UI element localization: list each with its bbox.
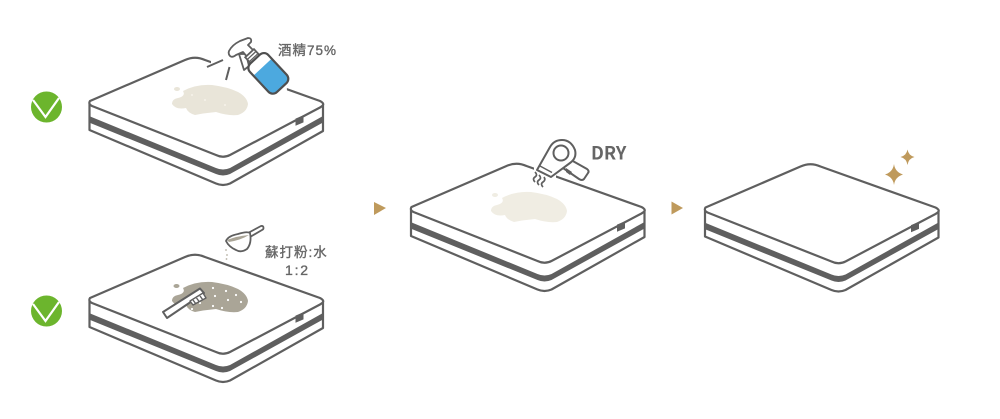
- stain: drying: [491, 192, 567, 222]
- label: baking soda to water ratio: [265, 244, 328, 278]
- arrow: to clean: [672, 202, 683, 214]
- check icon: step 1: [31, 92, 62, 122]
- stain: baking soda paste: [172, 282, 248, 312]
- gap behind spray bottle: [211, 53, 287, 93]
- label: alcohol 75%: 酒精75%: [278, 43, 337, 58]
- icon: sparkles: [885, 150, 914, 185]
- clean mattress: [704, 150, 939, 292]
- gap behind hair dryer: [534, 160, 556, 182]
- stain: alcohol-damped: [172, 85, 248, 115]
- icon: spray bottle: [229, 38, 291, 96]
- mattress with alcohol spray: [89, 38, 337, 185]
- label: baking soda to water ratio: 蘇打粉:水: [265, 244, 328, 260]
- spray lines: [207, 60, 230, 80]
- label: baking soda to water ratio: 1:2: [285, 262, 310, 278]
- icon: measuring scoop: [225, 226, 264, 260]
- mattress with baking soda paste: [89, 226, 328, 382]
- icon: hair dryer: [534, 140, 589, 187]
- arrow: to drying: [374, 202, 386, 215]
- label: dry: DRY: [591, 140, 627, 166]
- check icon: step 2: [31, 296, 62, 326]
- mattress with hair dryer: [410, 140, 645, 291]
- icon: scrub brush: [163, 288, 206, 318]
